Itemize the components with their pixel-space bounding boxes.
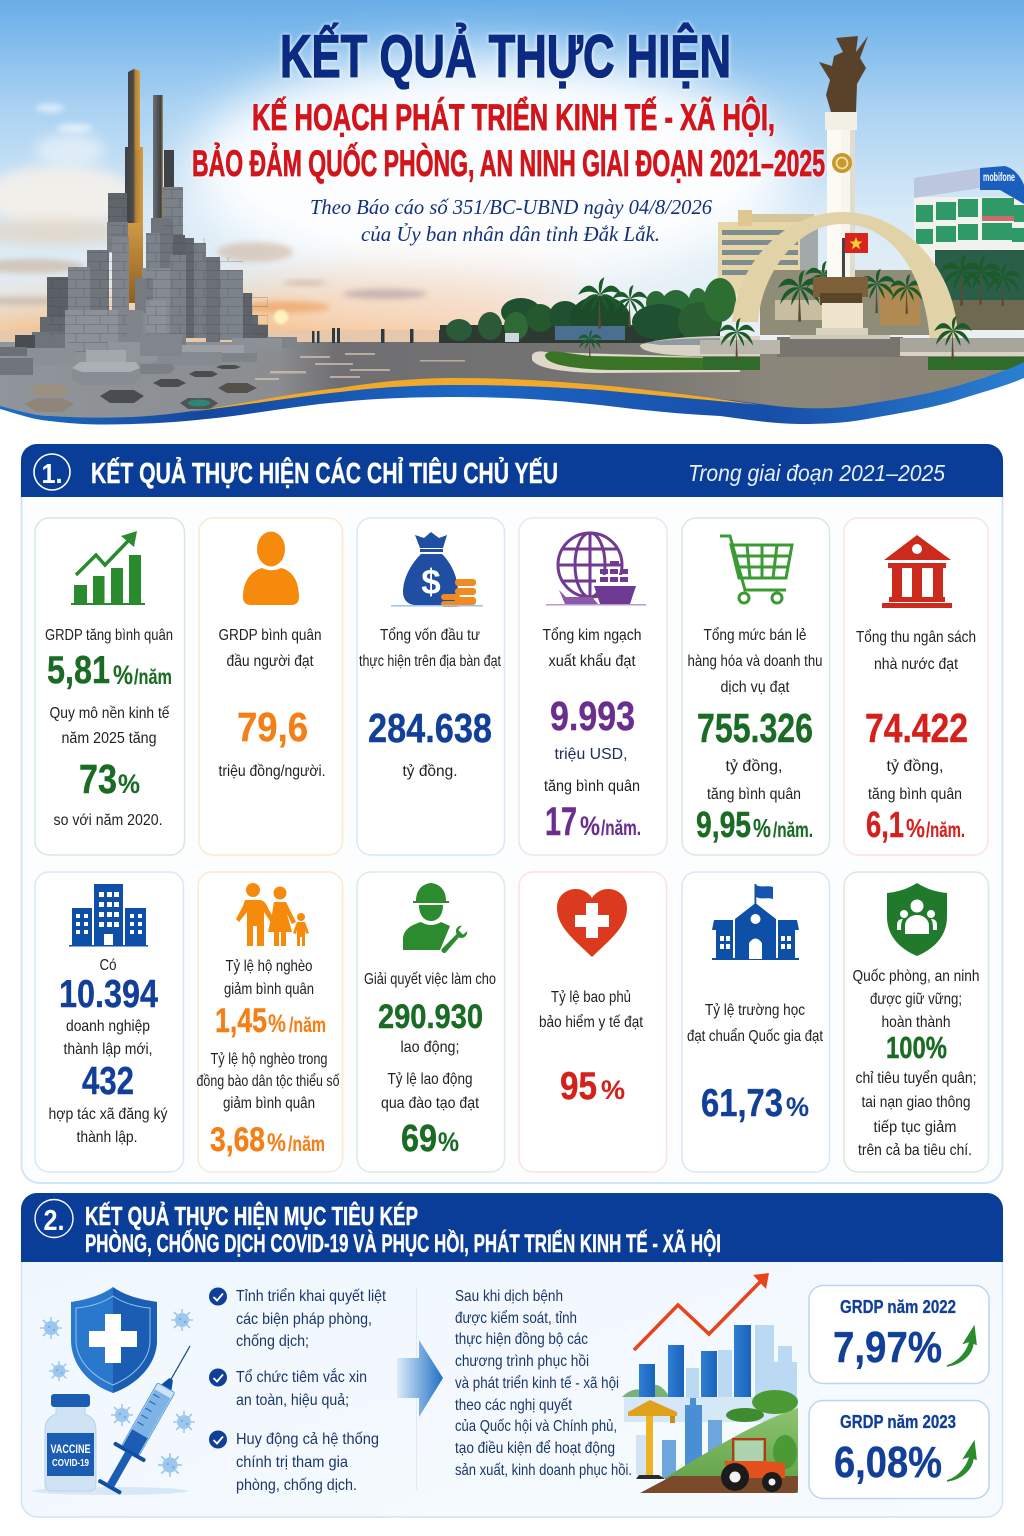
text: Tổng vốn đầu tư [380, 626, 480, 644]
text: doanh nghiệp [66, 1018, 150, 1035]
text: 10.394 [59, 973, 158, 1016]
illustration: economic recovery [622, 1273, 798, 1493]
check item 3: phòng, chống dịch. [236, 1477, 357, 1494]
card: schools [682, 872, 830, 1172]
text: thành lập. [76, 1129, 138, 1146]
text: /năm [134, 666, 172, 689]
text [542, 626, 642, 844]
text [852, 968, 980, 1159]
shield [71, 1287, 157, 1393]
recovery paragraph: tạo điều kiện để hoạt động [455, 1439, 615, 1457]
text [45, 627, 173, 829]
source note: của Ủy ban nhân dân tỉnh Đắk Lắk. [361, 222, 660, 246]
check item 3: Huy động cả hệ thống [236, 1431, 379, 1448]
text: so với năm 2020. [54, 812, 162, 829]
icon: family [236, 883, 309, 946]
icon: school [712, 884, 799, 960]
panel: section 1 [21, 444, 1003, 1183]
syringe [93, 1337, 206, 1497]
recovery paragraph: chương trình phục hồi [455, 1353, 589, 1370]
check item 2 [209, 1367, 367, 1409]
text [688, 626, 822, 845]
check item 3 [209, 1430, 379, 1494]
text [196, 958, 340, 1159]
hedges and cycads [578, 316, 1024, 370]
arrow [397, 1288, 443, 1490]
text: dịch vụ đạt [720, 679, 790, 696]
text: đạt chuẩn Quốc gia đạt [687, 1027, 823, 1045]
card: investment [357, 518, 504, 855]
text: Tỷ lệ hộ nghèo [226, 958, 313, 975]
section 1 header: 1. [42, 458, 62, 489]
text: lao động; [400, 1039, 460, 1056]
tree line [440, 277, 722, 343]
icon: office buildings [69, 884, 148, 946]
text: triệu đồng/người. [218, 763, 326, 780]
viruses [40, 1309, 195, 1477]
monument: stone pyramid [0, 69, 297, 385]
icon: money bag [391, 532, 483, 607]
card: health insurance [519, 872, 666, 1172]
text: Giải quyết việc làm cho [364, 971, 496, 988]
text: đồng bào dân tộc thiểu số [196, 1072, 340, 1090]
check item 1: Tỉnh triển khai quyết liệt [236, 1287, 386, 1305]
plaza light stripes [255, 353, 465, 380]
section 1 header: Trong giai đoạn 2021–2025 [688, 460, 945, 486]
text: thành lập mới, [64, 1041, 152, 1058]
text: tăng bình quân [544, 778, 640, 795]
illustration: vaccine, shield and syringe [32, 1287, 206, 1497]
section 2 header: 2. [44, 1205, 64, 1237]
sea horizon [0, 330, 470, 345]
recovery paragraph: của Quốc hội và Chính phủ, [455, 1418, 617, 1435]
small hill behind bars [622, 1385, 670, 1397]
central memorial [700, 277, 1024, 357]
text: % [267, 1129, 286, 1157]
under-arch scene [704, 270, 930, 335]
card: GRDP per capita [199, 518, 342, 855]
text: 1,45 [215, 1002, 267, 1040]
text: Tỷ lệ bao phủ [551, 989, 631, 1006]
card: defence and security [844, 872, 988, 1172]
text: hợp tác xã đăng ký [48, 1106, 168, 1123]
text: /năm. [601, 817, 641, 840]
text [539, 989, 643, 1108]
text: tai nạn giao thông [862, 1094, 970, 1111]
section 2 header: KẾT QUẢ THỰC HIỆN MỤC TIÊU KÉP [85, 1201, 418, 1231]
check item 1: các biện pháp phòng, [236, 1311, 372, 1328]
arch [732, 212, 958, 342]
section 1 header: KẾT QUẢ THỰC HIỆN CÁC CHỈ TIÊU CHỦ YẾU [91, 456, 558, 490]
tractor [721, 1439, 785, 1492]
text: Quốc phòng, an ninh [852, 968, 980, 985]
text: 100% [886, 1030, 947, 1065]
text: 284.638 [368, 705, 492, 751]
hero banner [0, 0, 1024, 440]
text: /năm. [773, 819, 813, 842]
section 2 header: PHÒNG, CHỐNG DỊCH COVID-19 VÀ PHỤC HỒI, PHÁT TRIỂN KINH TẾ - XÃ HỘI [85, 1228, 721, 1258]
text: /năm [288, 1133, 325, 1156]
text: Tỷ lệ hộ nghèo trong [210, 1051, 328, 1068]
palms [778, 254, 1021, 322]
check item 1: chống dịch; [236, 1333, 309, 1350]
text: 432 [82, 1060, 134, 1103]
stat: GRDP 2023: 6,08% [834, 1438, 942, 1487]
text: Tổng thu ngân sách [856, 628, 976, 646]
source note [310, 195, 712, 246]
icon: up arrow [947, 1327, 976, 1366]
text: GRDP tăng bình quân [45, 627, 173, 644]
city middle [636, 1398, 722, 1478]
text: % [438, 1127, 459, 1157]
recovery paragraph: Sau khi dịch bệnh [455, 1288, 563, 1305]
fountain and hedge [532, 336, 760, 373]
text: được giữ vững; [870, 991, 962, 1008]
card: poverty [196, 872, 342, 1172]
text: tăng bình quân [707, 786, 801, 803]
stat: GRDP 2022 [809, 1286, 989, 1384]
text: 17 [545, 800, 577, 844]
text: hoàn thành [882, 1014, 950, 1031]
icon: growth chart [71, 531, 145, 605]
recovery paragraph: và phát triển kinh tế - xã hội [455, 1374, 619, 1392]
text: % [753, 813, 771, 843]
subtitle: KẾ HOẠCH PHÁT TRIỂN KINH TẾ - XÃ HỘI, [252, 96, 775, 138]
card: export [519, 518, 667, 855]
text: /năm [289, 1014, 326, 1037]
panel: section 2 [21, 1193, 1003, 1517]
text [687, 1002, 823, 1125]
text [218, 627, 326, 780]
stat: GRDP 2022: GRDP năm 2022 [840, 1297, 956, 1317]
section 1 header [21, 444, 1003, 497]
text: 79,6 [237, 704, 308, 750]
text: tiếp tục giảm [874, 1119, 956, 1136]
hill and ground [640, 1390, 798, 1493]
text: % [268, 1010, 286, 1038]
recovery paragraph: thực hiện đồng bộ các [455, 1331, 588, 1348]
icon: worker [403, 883, 468, 954]
text: Tỷ lệ trường học [705, 1002, 805, 1019]
text: thực hiện trên địa bàn đạt [359, 653, 501, 670]
card: budget [844, 518, 988, 855]
stat: GRDP 2022: 7,97% [833, 1323, 942, 1372]
check item 3: chính trị tham gia [236, 1454, 348, 1471]
card: GRDP growth [35, 518, 184, 855]
check item 1 [209, 1287, 386, 1350]
title: KẾT QUẢ THỰC HIỆN [280, 23, 731, 90]
text: xuất khẩu đạt [548, 652, 636, 670]
text [364, 971, 496, 1160]
text: 290.930 [378, 998, 483, 1036]
block joints [47, 187, 268, 352]
text: 755.326 [697, 705, 813, 751]
text: tăng bình quân [868, 786, 962, 803]
text: chỉ tiêu tuyển quân; [856, 1069, 976, 1087]
text: 73 [79, 756, 117, 802]
icon: heart with cross [557, 889, 627, 957]
text: trên cả ba tiêu chí. [858, 1142, 972, 1159]
text: hàng hóa và doanh thu [688, 653, 822, 670]
icon: shield with people [887, 883, 947, 956]
text [48, 957, 168, 1146]
text: giảm bình quân [223, 1095, 315, 1112]
text: đầu người đạt [226, 653, 314, 670]
text: giảm bình quân [224, 981, 314, 998]
glow and clouds [0, 55, 790, 385]
text: GRDP bình quân [218, 627, 322, 644]
text: % [580, 811, 600, 841]
text: 95 [560, 1065, 597, 1108]
hexagon paving [24, 365, 257, 412]
icon: person [243, 532, 299, 605]
text: 6,1 [866, 804, 904, 845]
building left [718, 210, 818, 294]
text: % [906, 813, 925, 843]
text: tỷ đồng, [726, 758, 782, 775]
icon: money bag: $ [421, 563, 441, 602]
subtitle [192, 96, 825, 184]
icon: bank [882, 535, 952, 608]
section 2 header [21, 1193, 1003, 1262]
text: 9,95 [696, 804, 751, 845]
text: Tổng kim ngạch [542, 626, 642, 644]
text: 5,81 [47, 649, 110, 692]
checklist [209, 1287, 386, 1494]
source note: Theo Báo cáo số 351/BC-UBND ngày 04/8/2026 [310, 195, 712, 219]
icon: globe and ship [546, 533, 646, 606]
flag [842, 233, 868, 278]
text: % [118, 769, 140, 799]
text: Tỷ lệ lao động [388, 1071, 472, 1088]
building right: mobifone [905, 166, 1024, 330]
plaza [0, 342, 1024, 432]
text: % [601, 1075, 625, 1105]
text: tỷ đồng. [402, 763, 458, 780]
trend arrow [634, 1273, 769, 1350]
text [856, 628, 976, 845]
people on seafront [312, 328, 442, 343]
text: năm 2025 tăng [62, 730, 156, 747]
faded city [624, 1325, 798, 1422]
crane [628, 1400, 677, 1479]
text: /năm. [926, 819, 965, 842]
text: nhà nước đạt [874, 656, 958, 673]
icon: shopping cart [720, 536, 792, 603]
stat: GRDP 2023: GRDP năm 2023 [840, 1412, 956, 1432]
recovery paragraph: được kiểm soát, tỉnh [455, 1309, 577, 1327]
stat: GRDP 2023 [809, 1400, 989, 1498]
vaccine vial: VACCINE [50, 1444, 91, 1456]
text: % [113, 660, 133, 690]
check item 2: an toàn, hiệu quả; [236, 1392, 349, 1409]
card: enterprises [35, 872, 184, 1172]
text: 74.422 [865, 705, 968, 751]
text [359, 626, 501, 780]
text: 9.993 [550, 693, 635, 739]
recovery paragraph [455, 1288, 632, 1479]
text: 3,68 [210, 1121, 265, 1159]
card: employment [357, 872, 504, 1172]
recovery paragraph: theo các nghị quyết [455, 1397, 572, 1414]
text: Tổng mức bán lẻ [704, 626, 807, 644]
vaccine vial [45, 1394, 96, 1491]
text: bảo hiểm y tế đạt [539, 1013, 643, 1031]
text: 69 [401, 1118, 437, 1160]
bars [639, 1325, 751, 1397]
base steps [0, 334, 297, 385]
text: Có [100, 957, 117, 974]
recovery paragraph: sản xuất, kinh doanh phục hồi. [455, 1462, 632, 1479]
text: tỷ đồng, [886, 758, 944, 775]
text: qua đào tạo đạt [381, 1095, 479, 1112]
vaccine vial: COVID-19 [52, 1457, 89, 1469]
text: triệu USD, [554, 746, 628, 763]
check item 2: Tổ chức tiêm vắc xin [236, 1367, 367, 1386]
text: 61,73 [701, 1082, 783, 1125]
card: retail [682, 518, 830, 855]
statue [819, 36, 868, 112]
victory tower [825, 112, 857, 278]
icon: up arrow [947, 1442, 976, 1481]
text: Quy mô nền kinh tế [50, 705, 170, 722]
wave [0, 362, 1024, 440]
sky [0, 0, 1024, 345]
text: % [786, 1092, 809, 1122]
